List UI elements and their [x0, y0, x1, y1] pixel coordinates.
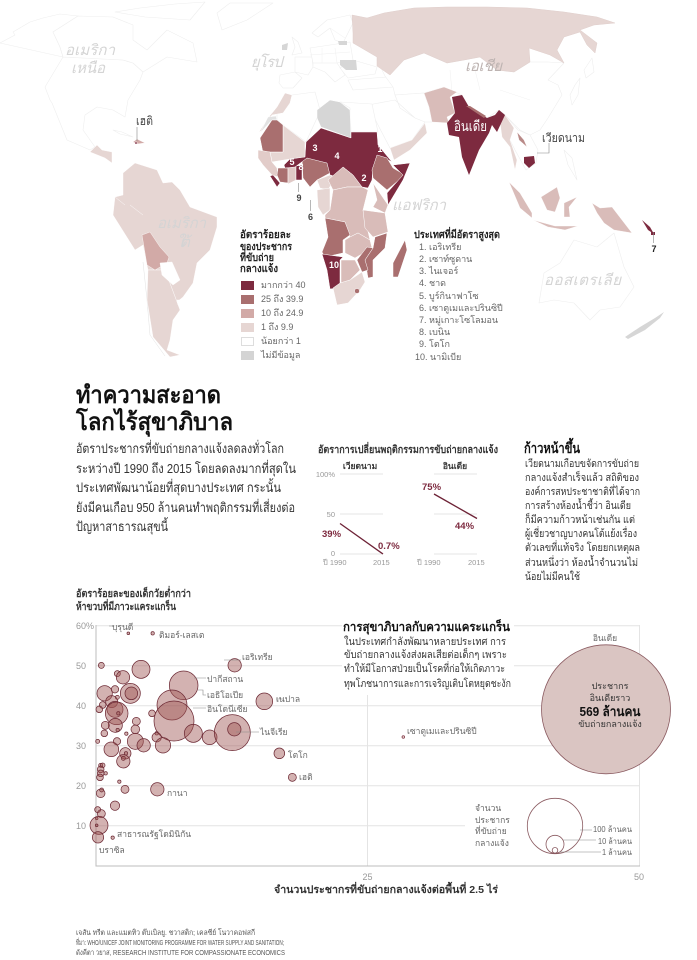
map: rank labels outside: [296, 183, 657, 254]
map: rank numbers: 8: [298, 162, 304, 172]
line chart: india: อินเดีย: [443, 461, 467, 471]
line chart gridlines and axis labels: 50: [327, 510, 335, 519]
y axis labels: 60%: [76, 621, 94, 631]
map legend: มากกว่า 40: [261, 280, 306, 290]
credits and sources: ดังคีตา วยาส, RESEARCH INSTITUTE FOR COMPASSIONATE ECONOMICS: [76, 948, 285, 957]
line chart: india: 75%: [422, 482, 442, 493]
top ten countries list: 7. หมู่เกาะโซโลมอน: [419, 315, 498, 326]
map: rank numbers: [289, 143, 383, 270]
line chart: india: 44%: [455, 521, 475, 532]
map: india: [447, 95, 505, 175]
line chart gridlines and axis labels: 0: [331, 549, 335, 558]
bubble country labels: กานา: [167, 788, 188, 798]
sidebar: progress: การสร้างห้องน้ำชี้ว่า อินเดีย: [525, 498, 631, 512]
intro text: [76, 440, 296, 535]
line chart title: อัตราการเปลี่ยนพฤติกรรมการขับถ่ายกลางแจ้ง: [318, 441, 498, 456]
map legend: ที่ขับถ่าย: [240, 249, 274, 264]
map legend: 10 ถึง 24.9: [261, 308, 303, 318]
callout: sanitation and stunting: การสุขาภิบาลกับความแคระแกร็น: [343, 619, 510, 635]
continent labels: ยุโรป: [251, 53, 286, 71]
y axis labels: [76, 621, 94, 831]
line chart gridlines and axis labels: 100%: [316, 470, 335, 479]
y axis labels: 40: [76, 701, 86, 711]
sidebar: progress: เวียดนามเกือบขจัดการขับถ่าย: [525, 457, 639, 470]
sidebar: progress: ก็มีความก้าวหน้าเช่นกัน แต่: [525, 512, 635, 526]
europe and asia no-data patches: [282, 41, 357, 70]
sidebar: progress: ก้าวหน้าขึ้น: [524, 437, 580, 456]
map: rank labels outside: 7: [651, 244, 657, 254]
bubble country labels: เฮติ: [299, 772, 313, 782]
line chart gridlines and axis labels: [316, 470, 485, 567]
y axis labels: 20: [76, 781, 86, 791]
intro text: ประเทศพัฒนาน้อยที่สุดบางประเทศ กระนั้น: [76, 478, 281, 496]
map: asia shaded countries: [390, 87, 632, 233]
continent labels: เหนือ: [71, 60, 108, 77]
map legend: ของประชากร: [240, 241, 292, 253]
top ten countries list: 6. เซาตูเมและปรินซิปี: [419, 303, 503, 314]
callout: sanitation and stunting: ทุพโภชนาการและการเจริญเติบโตหยุดชะงัก: [344, 677, 511, 690]
india big bubble: ประชากร: [592, 681, 629, 691]
top ten countries list: 5. บูร์กินาฟาโซ: [419, 290, 479, 302]
line charts: behaviour change: [316, 441, 498, 567]
label: india: อินเดีย: [454, 118, 487, 134]
country bubbles: [90, 632, 296, 843]
line chart: vietnam: 39%: [322, 529, 342, 540]
bubble country labels: เอริเทรีย: [242, 652, 273, 662]
sidebar: progress: ผู้เชี่ยวชาญบางคนโต้แย้งเรื่อง: [525, 526, 637, 540]
sidebar: progress: [524, 437, 640, 583]
x axis labels: 50: [634, 872, 644, 882]
india big bubble: 569 ล้านคน: [580, 704, 641, 719]
continent labels: [65, 42, 624, 289]
bubble country labels: เอธิโอเปีย: [207, 690, 243, 700]
map: unshaded land outlines: [0, 2, 634, 356]
bubble country labels: ติมอร์-เลสเต: [159, 630, 204, 640]
top ten countries list: 4. ชาด: [419, 278, 446, 288]
map: cambodia: [524, 156, 535, 168]
line chart gridlines and axis labels: ปี 1990: [322, 558, 347, 567]
map: rank labels outside: 6: [308, 212, 313, 222]
continent labels: แอฟริกา: [392, 197, 449, 214]
map legend: อัตราร้อยละ: [240, 228, 291, 241]
map: rank numbers: 5: [289, 157, 295, 167]
map legend: 1 ถึง 9.9: [261, 322, 293, 332]
main heading: โลกไร้สุขาภิบาล: [75, 407, 233, 438]
callout: sanitation and stunting: ทำให้มีโอกาสป่วยเป็นโรคที่ก่อให้เกิดภาวะ: [344, 661, 505, 675]
map legend: 25 ถึง 39.9: [261, 294, 303, 304]
sidebar: progress: ส่วนหนึ่งว่า ห้องน้ำจำนวนไม่: [525, 555, 638, 569]
bubble country labels: เนปาล: [276, 694, 300, 704]
line chart: vietnam: เวียดนาม: [343, 461, 377, 471]
map: rank numbers: 1: [377, 144, 383, 154]
top ten countries list: 9. โตโก: [419, 339, 450, 349]
scatter title: ห้าขวบที่มีภาวะแคระแกร็น: [76, 598, 177, 613]
bubble size legend: ประชากร: [475, 815, 510, 825]
bubble size legend: 100 ล้านคน: [593, 825, 632, 834]
sidebar: progress: น้อยไม่มีคนใช้: [525, 570, 580, 583]
map: rank numbers: 3: [312, 143, 318, 153]
x axis labels: [362, 872, 644, 882]
line chart gridlines and axis labels: 2015: [373, 558, 390, 567]
intro text: ปัญหาสาธารณสุขนี้: [76, 517, 168, 535]
intro text: ยังมีคนเกือบ 950 ล้านคนทำพฤติกรรมที่เสี่ยงต่อ: [76, 499, 295, 515]
label: haiti: [136, 114, 153, 141]
credits and sources: ที่มา: WHO/UNICEF JOINT MONITORING PROGRAMME FOR WATER SUPPLY AND SANITATION;: [76, 937, 284, 947]
india big bubble: [542, 633, 670, 774]
map legend: กลางแจ้ง: [240, 262, 278, 275]
line chart gridlines and axis labels: 2015: [468, 558, 485, 567]
top ten countries list: 1. เอริเทรีย: [419, 242, 461, 252]
continent labels: ใต้: [177, 233, 193, 251]
top ten countries list: ประเทศที่มีอัตราสูงสุด: [414, 226, 500, 242]
credits and sources: เจสัน ทรีต และแมตทิว ต๊บเบิลยู. ชวาสติก; เคลซีย์ โนวาคอฟสกี: [76, 928, 255, 937]
bubble country labels: เซาตูเมและปรินซิปี: [407, 726, 477, 737]
map: solomon islands: [642, 220, 655, 235]
continent labels: ออสเตรเลีย: [544, 272, 624, 289]
y axis labels: 10: [76, 821, 86, 831]
bubble country labels: อินโดนีเซีย: [207, 704, 247, 714]
map: russia: [352, 7, 615, 75]
scatter title: อัตราร้อยละของเด็กวัยต่ำกว่า: [76, 585, 191, 600]
bubble country labels: ปากีสถาน: [207, 674, 243, 684]
top ten countries list: 3. ไนเจอร์: [419, 265, 458, 276]
map legend: ไม่มีข้อมูล: [260, 350, 300, 361]
bubble size legend: กลางแจ้ง: [475, 838, 509, 848]
continent labels: อเมริกา: [65, 42, 118, 59]
india big bubble: อินเดีย: [593, 633, 617, 643]
callout: sanitation and stunting: [342, 619, 514, 690]
sidebar: progress: ตัวเลขที่แท้จริง โดยยกเหตุผล: [525, 540, 640, 554]
bubble country labels: [99, 622, 477, 855]
main heading: [75, 382, 233, 438]
india big bubble: อินเดียราว: [590, 693, 630, 703]
bubble size legend: 10 ล้านคน: [598, 837, 632, 846]
bubble size legend: ที่ขับถ่าย: [475, 825, 507, 836]
chart gridlines and axes: [96, 625, 640, 866]
label: vietnam: เวียดนาม: [542, 131, 585, 145]
label: vietnam: [537, 131, 585, 153]
bubble chart: [76, 621, 670, 896]
x axis title: จำนวนประชากรที่ขับถ่ายกลางแจ้งต่อพื้นที่ 2.5 ไร่: [274, 881, 498, 896]
scatter title: [76, 585, 191, 613]
top ten countries list: 2. เซาท์ซูดาน: [419, 253, 472, 265]
bubble country labels: บุรุนดี: [112, 622, 133, 633]
continent labels: เอเชีย: [465, 58, 505, 75]
intro text: ระหว่างปี 1990 ถึง 2015 โดยลดลงมากที่สุดใน: [76, 460, 296, 477]
main heading: ทำความสะอาด: [76, 382, 221, 409]
intro text: อัตราประชากรที่ขับถ่ายกลางแจ้งลดลงทั่วโลก: [76, 440, 284, 456]
map: rank numbers: 4: [334, 151, 340, 161]
bubble size legend: [475, 798, 632, 857]
sidebar: progress: กลางแจ้งสำเร็จแล้ว สถิติของ: [525, 470, 639, 484]
y axis labels: 30: [76, 741, 86, 751]
line chart: india: [422, 461, 477, 532]
line chart: vietnam: [322, 461, 400, 554]
world map: [0, 2, 664, 362]
line chart gridlines and axis labels: ปี 1990: [416, 558, 441, 567]
india big bubble: ขับถ่ายกลางแจ้ง: [578, 719, 642, 729]
map legend: [240, 228, 306, 361]
callout: sanitation and stunting: ขับถ่ายกลางแจ้งส่งผลเสียต่อเด็กๆ เพราะ: [344, 647, 507, 661]
map: south america: [90, 139, 217, 357]
bubble size legend: 1 ล้านคน: [602, 848, 632, 857]
map legend: น้อยกว่า 1: [261, 336, 301, 346]
bubble country labels: บราซิล: [99, 845, 125, 855]
credits and sources: [76, 928, 285, 957]
bubble country labels: ไนจีเรีย: [259, 727, 288, 737]
map: africa countries: [258, 93, 410, 305]
bubble country labels: สาธารณรัฐโดมินิกัน: [117, 829, 191, 840]
top ten countries list: 10. นามิเบีย: [415, 352, 461, 362]
label: haiti: เฮติ: [136, 114, 153, 128]
line chart: vietnam: 0.7%: [378, 541, 400, 552]
x axis labels: 25: [362, 872, 373, 882]
sao tome bubble: [402, 736, 405, 738]
map: nepal: [466, 106, 486, 118]
top ten countries list: [414, 226, 503, 362]
map: rank numbers: 10: [329, 260, 339, 270]
callout: sanitation and stunting: ในประเทศกำลังพัฒนาหลายประเทศ การ: [344, 635, 506, 648]
continent labels: อเมริกา: [157, 215, 209, 232]
bubble size legend: จำนวน: [475, 803, 501, 813]
map: new zealand: [625, 312, 664, 339]
y axis labels: 50: [76, 661, 86, 671]
top ten countries list: 8. เบนิน: [419, 327, 450, 337]
bubble country labels: โตโก: [288, 750, 308, 760]
map: rank labels outside: 9: [296, 193, 302, 203]
map: rank numbers: 2: [361, 173, 367, 183]
sidebar: progress: องค์การสหประชาชาติที่ได้จาก: [525, 484, 640, 498]
